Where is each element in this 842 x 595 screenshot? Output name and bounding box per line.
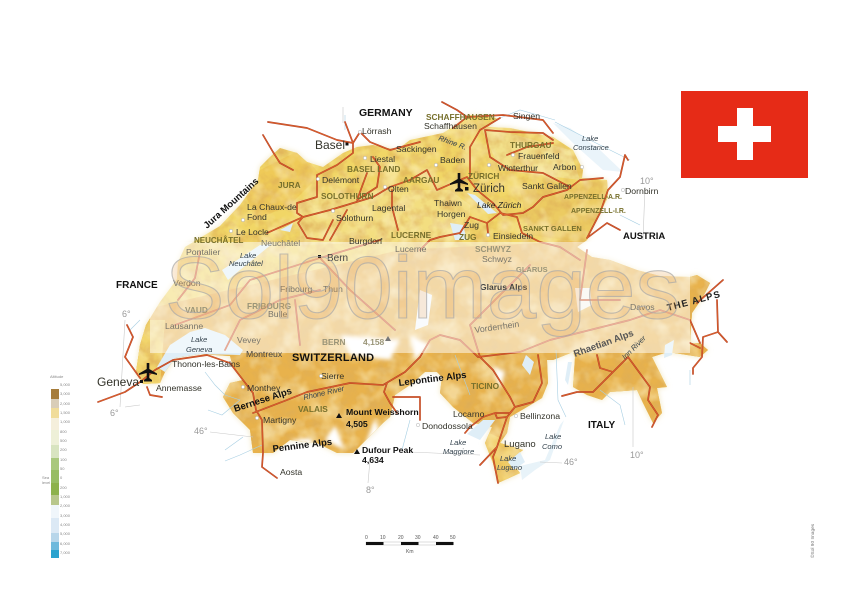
labels: mountain ranges: Bernese Alps bbox=[233, 386, 293, 415]
labels: cities: Frauenfeld bbox=[518, 151, 560, 161]
altitude legend: 1,000 bbox=[60, 419, 71, 424]
watermark: Sol90images bbox=[165, 238, 680, 337]
labels: countries bbox=[116, 107, 665, 431]
labels: cities: Olten bbox=[388, 184, 409, 194]
scale bar: 0 bbox=[365, 535, 368, 541]
labels: cities: Locarno bbox=[453, 409, 485, 419]
labels: cities: Lörrash bbox=[362, 126, 392, 136]
labels: cities: Liestal bbox=[370, 154, 395, 164]
labels: cities under the wash bbox=[165, 238, 655, 359]
altitude legend: 3,000 bbox=[60, 513, 71, 518]
labels: cantons: ZUG bbox=[459, 232, 477, 242]
altitude legend: 200 bbox=[60, 447, 67, 452]
labels: cities: Delémont bbox=[322, 175, 360, 185]
labels: cities: Dornbirn bbox=[625, 186, 658, 196]
labels: cantons: APPENZELL-A.R. bbox=[564, 194, 622, 201]
labels: cities: Baden bbox=[440, 155, 465, 165]
labels: lakes and rivers: Lugano bbox=[497, 463, 522, 472]
labels: cities under the wash: Lucerne bbox=[395, 244, 427, 254]
image credit: ©Sol 90 Images bbox=[809, 523, 816, 558]
altitude legend: 6,000 bbox=[60, 541, 71, 546]
scale bar: Km bbox=[406, 549, 414, 555]
labels: cities: Thaiwn bbox=[434, 198, 462, 208]
labels: lakes and rivers: Geneva bbox=[186, 345, 212, 354]
altitude legend: 5,000 bbox=[60, 531, 71, 536]
labels: lakes and rivers: Rhone River bbox=[302, 384, 346, 402]
labels: cities under the wash: Lausanne bbox=[165, 321, 203, 331]
labels: countries: FRANCE bbox=[116, 280, 158, 291]
labels: lakes and rivers: Lake bbox=[240, 251, 256, 260]
labels: cities: Sierre bbox=[321, 371, 344, 381]
coordinate labels: 8° bbox=[366, 485, 375, 495]
labels: cantons: VAUD bbox=[185, 305, 208, 315]
labels: cantons: FRIBOURG bbox=[247, 301, 291, 311]
city markers bbox=[140, 130, 625, 427]
panel: Swiss flag bbox=[681, 91, 808, 178]
labels: cities under the wash: Neuchâtel bbox=[261, 238, 300, 248]
labels: cities: Bellinzona bbox=[520, 411, 560, 421]
labels: cities: Zürich bbox=[473, 183, 505, 195]
coordinate labels: 46° bbox=[564, 457, 578, 467]
labels: cantons: LUCERNE bbox=[391, 230, 432, 240]
labels: lakes and rivers: Lake bbox=[545, 432, 561, 441]
labels: cities: Arbon bbox=[553, 162, 576, 172]
labels: cantons: ZÜRICH bbox=[468, 171, 499, 181]
labels: cities under the wash: Schwyz bbox=[482, 254, 512, 264]
road network bbox=[98, 102, 727, 483]
labels: cantons: VALAIS bbox=[298, 404, 328, 414]
altitude legend: 200 bbox=[60, 485, 67, 490]
labels: countries: ITALY bbox=[588, 420, 616, 431]
labels: cities: Basel bbox=[315, 138, 345, 152]
labels: cities under the wash: Montreux bbox=[246, 349, 283, 359]
peaks with elevations: Dufour Peak bbox=[362, 445, 413, 455]
labels: cities: Burgdorf bbox=[349, 236, 383, 246]
icon: airplane at Zürich bbox=[450, 173, 468, 192]
coordinate labels: 6° bbox=[110, 408, 119, 418]
altitude legend: 2,000 bbox=[60, 401, 71, 406]
labels: cities: Annemasse bbox=[156, 383, 202, 393]
labels: cities under the wash: Fribourg bbox=[280, 284, 313, 294]
labels: cities under the wash: Bern bbox=[327, 253, 348, 264]
labels: cities: Martigny bbox=[263, 415, 297, 425]
altitude legend bbox=[42, 374, 71, 558]
altitude legend: 2,000 bbox=[60, 503, 71, 508]
labels: cities under the wash: Bulle bbox=[268, 309, 287, 319]
labels: cities: Horgen bbox=[437, 209, 466, 219]
watermark wash band bbox=[150, 242, 690, 353]
labels: cities: Schaffhausen bbox=[424, 121, 477, 131]
labels: cities under the wash: Pontalier bbox=[186, 247, 220, 257]
labels: lakes and rivers bbox=[186, 133, 648, 472]
altitude legend: 3,000 bbox=[60, 391, 71, 396]
icon: airplane at Geneva bbox=[139, 363, 157, 382]
labels: cities: Einsiedeln bbox=[493, 231, 533, 241]
scale bar: 30 bbox=[415, 535, 421, 541]
labels: cities: Solothurn bbox=[336, 213, 373, 223]
labels: lakes and rivers: Rhine R. bbox=[437, 133, 468, 152]
peaks with elevations: 4,634 bbox=[362, 455, 384, 465]
coordinate labels bbox=[110, 176, 654, 495]
labels: cities: Winterthur bbox=[498, 163, 538, 173]
labels: cities: Aosta bbox=[280, 467, 302, 477]
labels: cantons: APPENZELL-I.R. bbox=[571, 208, 626, 215]
graticule lines bbox=[120, 107, 645, 483]
labels: lakes and rivers: Lake Zürich bbox=[477, 200, 522, 210]
altitude legend: 7,000 bbox=[60, 550, 71, 555]
altitude legend: Altitude bbox=[50, 374, 64, 379]
altitude legend: 50 bbox=[60, 466, 65, 471]
labels: cantons: SCHAFFHAUSEN bbox=[426, 112, 495, 122]
labels: cities: Sackingen bbox=[396, 144, 437, 154]
labels: lakes and rivers: Lake bbox=[500, 454, 516, 463]
labels: cities under the wash: Davos bbox=[630, 302, 655, 312]
labels: mountain ranges: Glarus Alps bbox=[480, 282, 528, 292]
labels: cantons: GLARUS bbox=[516, 265, 548, 274]
coordinate labels: 46° bbox=[194, 426, 208, 436]
peaks with elevations: Mount Weisshorn bbox=[346, 407, 419, 417]
labels: countries: SWITZERLAND bbox=[292, 352, 374, 364]
labels: cities: Lugano bbox=[504, 439, 536, 450]
labels: cantons: BERN bbox=[322, 337, 346, 347]
scale bar: 50 bbox=[450, 535, 456, 541]
peaks with elevations bbox=[336, 336, 419, 465]
labels: cantons: THURGAU bbox=[510, 140, 551, 150]
labels: lakes and rivers: Maggiore bbox=[443, 447, 474, 456]
altitude legend: 800 bbox=[60, 429, 67, 434]
labels: cantons: SOLOTHURN bbox=[321, 191, 374, 201]
terrain: relief fill of the country bbox=[136, 115, 710, 483]
labels: cities under the wash: 4,158 bbox=[363, 337, 385, 347]
altitude legend: Sea bbox=[42, 475, 50, 480]
labels: cities: Thonon-les-Bains bbox=[172, 359, 241, 369]
rivers bbox=[130, 110, 690, 461]
altitude legend: level bbox=[42, 480, 50, 485]
peaks with elevations: 4,505 bbox=[346, 419, 368, 429]
labels: cities: Geneva bbox=[97, 375, 139, 389]
altitude legend: 0 bbox=[60, 475, 63, 480]
coordinate labels: 6° bbox=[122, 309, 131, 319]
labels: cities: La Chaux-de bbox=[247, 202, 297, 212]
labels: cities under the wash: Verdon bbox=[173, 278, 201, 288]
labels: cities: Le Locle bbox=[236, 227, 269, 237]
labels: lakes and rivers: Lake bbox=[450, 438, 466, 447]
scale bar bbox=[365, 535, 456, 555]
labels: cities under the wash: Vevey bbox=[237, 335, 261, 345]
labels: mountain ranges: Rhaetian Alps bbox=[572, 328, 635, 360]
map of Switzerland infographic bbox=[42, 91, 815, 558]
coordinate labels: 10° bbox=[640, 176, 654, 186]
labels: cantons: AARGAU bbox=[403, 175, 439, 185]
labels: lakes and rivers: Lake bbox=[191, 335, 207, 344]
labels: cities: Monthey bbox=[247, 383, 281, 393]
labels: cities: Singen bbox=[513, 111, 540, 121]
labels: lakes and rivers: Constance bbox=[573, 143, 609, 152]
altitude legend: 100 bbox=[60, 457, 67, 462]
altitude legend: 1,000 bbox=[60, 494, 71, 499]
altitude legend: 500 bbox=[60, 438, 67, 443]
lakes bbox=[157, 123, 674, 480]
snow bbox=[290, 335, 505, 450]
relief glow around the country bbox=[136, 115, 710, 483]
labels: lakes and rivers: Inn River bbox=[620, 333, 648, 361]
altitude legend: 5,000 bbox=[60, 382, 71, 387]
coordinate labels: 10° bbox=[630, 450, 644, 460]
scale bar: 40 bbox=[433, 535, 439, 541]
labels: cantons: SCHWYZ bbox=[475, 244, 511, 254]
scale bar: 20 bbox=[398, 535, 404, 541]
labels: cantons bbox=[185, 112, 626, 414]
labels: cities under the wash: Thun bbox=[323, 284, 343, 294]
labels: cities under the wash: Vorderrhein bbox=[474, 319, 520, 335]
labels: cantons: BASEL LAND bbox=[347, 164, 400, 174]
labels: cities: Zug bbox=[464, 220, 479, 230]
labels: lakes and rivers: Lake bbox=[582, 134, 598, 143]
labels: cities: Lagental bbox=[372, 203, 405, 213]
altitude legend: 4,000 bbox=[60, 522, 71, 527]
labels: cities: Donodossola bbox=[422, 421, 473, 431]
altitude legend: 1,500 bbox=[60, 410, 71, 415]
labels: cities: Fond bbox=[247, 212, 267, 222]
scale bar: 10 bbox=[380, 535, 386, 541]
labels: cantons: JURA bbox=[278, 180, 301, 190]
labels: cantons: NEUCHÂTEL bbox=[194, 236, 243, 245]
labels: mountain ranges bbox=[202, 176, 722, 455]
labels: lakes and rivers: Como bbox=[542, 442, 562, 451]
labels: mountain ranges: Jura Mountains bbox=[202, 176, 261, 231]
labels: cities bbox=[97, 111, 658, 477]
labels: mountain ranges: Lepontine Alps bbox=[398, 370, 467, 389]
labels: mountain ranges: Pennine Alps bbox=[272, 437, 333, 455]
labels: cantons: SANKT GALLEN bbox=[523, 224, 582, 233]
labels: countries: GERMANY bbox=[359, 107, 413, 119]
labels: lakes and rivers: Neuchâtel bbox=[229, 259, 263, 268]
labels: mountain ranges: THE ALPS bbox=[666, 289, 722, 314]
labels: cities: Sankt Gallen bbox=[522, 181, 572, 191]
labels: cantons: TICINO bbox=[471, 381, 500, 391]
labels: countries: AUSTRIA bbox=[623, 231, 665, 242]
